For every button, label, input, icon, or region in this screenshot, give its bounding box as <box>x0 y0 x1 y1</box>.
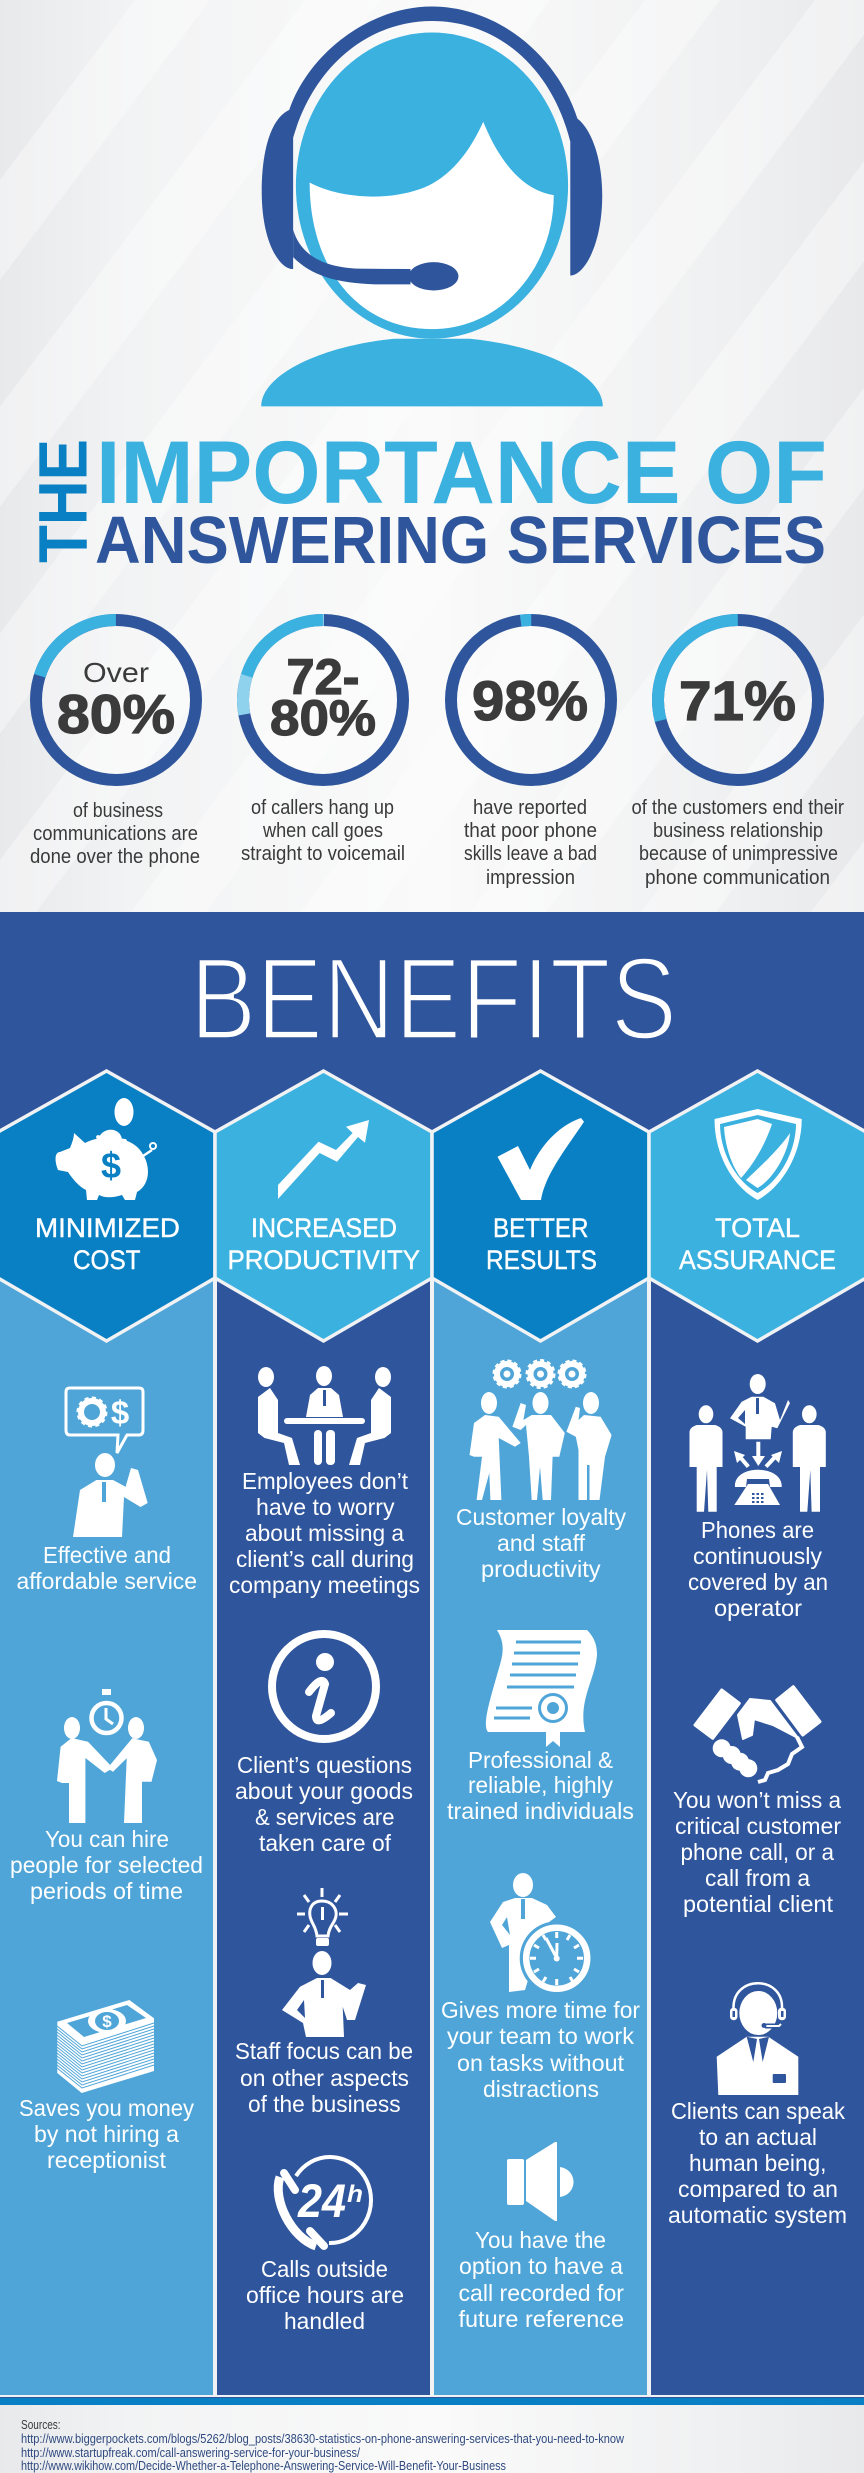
label: increased productivity: INCREASED <box>251 1213 397 1243</box>
stat: 71%: 71% <box>679 669 796 732</box>
text: actual human: automatic system <box>668 2202 847 2228</box>
title: IMPORTANCE OF <box>96 422 827 522</box>
panel: sources <box>0 2405 864 2473</box>
stat: 72-80%: straight to voicemail <box>241 842 405 865</box>
text: actual human: to an actual <box>699 2124 817 2150</box>
stat: 71%: business relationship <box>653 819 823 842</box>
text: client questions: & services are <box>255 1804 394 1830</box>
text: more time: your team to work <box>447 2023 635 2049</box>
stat: over 80%: done over the phone <box>30 845 200 868</box>
icon: shield <box>715 1109 802 1200</box>
label: better results: BETTER <box>493 1213 588 1243</box>
icon: speaker <box>507 2142 574 2221</box>
icon: 24 hour phone <box>278 2157 371 2246</box>
panel: increased productivity header <box>215 1071 432 1341</box>
text: effective service: Effective and <box>43 1542 171 1568</box>
text: recorded calls: option to have a <box>459 2253 623 2279</box>
stat: 98%: that poor phone <box>464 819 597 842</box>
stat: 72-80%: 72- <box>286 649 360 705</box>
icon: certificate scroll <box>486 1630 597 1747</box>
text: professional: Professional & <box>468 1747 613 1773</box>
text: professional <box>447 1747 634 1824</box>
icon: gear and dollar speech bubble with person <box>66 1388 148 1537</box>
text: client questions: Client’s questions <box>237 1752 412 1778</box>
stat: 98% <box>442 611 620 889</box>
text: saves money: Saves you money <box>19 2095 194 2121</box>
text: recorded calls: call recorded for <box>458 2280 624 2306</box>
label: total assurance: TOTAL <box>715 1213 800 1243</box>
text: staff focus: of the business <box>248 2091 401 2117</box>
text: actual human <box>668 2098 847 2228</box>
text: employees: Employees don’t <box>242 1468 409 1494</box>
label: better results: RESULTS <box>486 1245 597 1275</box>
text: won't miss a call: phone call, or a <box>680 1839 834 1865</box>
label: increased productivity: PRODUCTIVITY <box>228 1245 420 1275</box>
icon: team directing phone <box>690 1374 826 1512</box>
text: client questions: taken care of <box>259 1830 392 1856</box>
text: employees: client’s call during <box>236 1546 414 1572</box>
stat: 72-80%: 80% <box>270 690 376 746</box>
stat: over 80%: of business <box>73 799 163 822</box>
stat: 71%: phone communication <box>645 866 830 889</box>
icon: person with clock <box>490 1873 594 1995</box>
icon: 24 hour phone: h <box>347 2181 363 2208</box>
text: won't miss a call: potential client <box>683 1891 834 1917</box>
text: hire people: periods of time <box>30 1878 183 1904</box>
icon: information circle <box>272 1634 376 1739</box>
label: increased productivity <box>228 1213 420 1275</box>
text: won't miss a call: call from a <box>705 1865 810 1891</box>
text: actual human: human being, <box>689 2150 826 2176</box>
panel: benefits background <box>0 912 864 2398</box>
panel: sources: Sources: <box>21 2417 61 2432</box>
panel: column backgrounds <box>0 1130 864 2397</box>
text: won't miss a call: critical customer <box>675 1813 841 1839</box>
text: hire people: You can hire <box>45 1826 169 1852</box>
label: total assurance <box>679 1213 836 1275</box>
stat: 71%: of the customers end their <box>632 796 844 819</box>
text: more time: Gives more time for <box>441 1997 640 2023</box>
text: phones covered <box>688 1517 828 1621</box>
text: outside hours: office hours are <box>246 2282 404 2308</box>
stat: 98%: have reported <box>473 796 587 819</box>
label: minimized cost: COST <box>73 1245 140 1275</box>
text: client questions <box>235 1752 413 1856</box>
text: customer loyalty: and staff <box>497 1530 586 1556</box>
label: total assurance: ASSURANCE <box>679 1245 836 1275</box>
icon: piggy bank: $ <box>101 1145 121 1186</box>
icon: team with gears <box>470 1360 612 1501</box>
stat: 98%: skills leave a bad <box>464 842 597 865</box>
panel: sources: http://www.wikihow.com/Decide-Whether-a-Telephone-Answering-Service-Will-Benefit-Your-Business <box>21 2458 506 2473</box>
text: phones covered: Phones are <box>701 1517 814 1543</box>
stat: over 80% <box>15 599 217 868</box>
stat: 71% <box>632 603 844 889</box>
icon: rising arrow <box>278 1120 369 1199</box>
text: phones covered: continuously <box>693 1543 823 1569</box>
text: employees: company meetings <box>229 1572 420 1598</box>
icon: stack of money <box>57 2000 154 2093</box>
stat: over 80%: 80% <box>57 683 175 745</box>
icon: gear and dollar speech bubble with person: $ <box>111 1394 129 1431</box>
label: minimized cost <box>35 1213 180 1275</box>
panel: total assurance header <box>649 1071 864 1341</box>
heading: benefits: BENEFITS <box>190 933 677 1064</box>
stat: 71%: because of unimpressive <box>639 842 838 865</box>
text: client questions: about your goods <box>235 1778 413 1804</box>
panel: sources: http://www.biggerpockets.com/blogs/5262/blog_posts/38630-statistics-on-phone-answering-services-that-you-need-to-know <box>21 2431 625 2446</box>
panel: better results header <box>432 1071 649 1341</box>
text: recorded calls: You have the <box>475 2227 606 2253</box>
title <box>24 422 827 578</box>
text: saves money: by not hiring a <box>34 2121 179 2147</box>
icon: 24 hour phone: 24 <box>297 2174 346 2227</box>
text: employees <box>229 1468 420 1598</box>
stat: 72-80%: when call goes <box>262 819 383 842</box>
stat: over 80%: communications are <box>33 822 198 845</box>
text: staff focus: on other aspects <box>240 2065 409 2091</box>
panel: minimized cost header <box>0 1071 215 1341</box>
title: ANSWERING SERVICES <box>95 503 826 578</box>
text: recorded calls <box>458 2227 624 2332</box>
text: more time <box>441 1997 640 2102</box>
text: employees: have to worry <box>256 1494 395 1520</box>
label: minimized cost: MINIMIZED <box>35 1213 180 1243</box>
text: saves money <box>19 2095 194 2173</box>
text: professional: reliable, highly <box>468 1772 613 1798</box>
text: staff focus: Staff focus can be <box>235 2038 413 2064</box>
title: THE <box>24 439 102 563</box>
icon: person with light bulb <box>282 1888 366 2037</box>
text: effective service: affordable service <box>16 1568 197 1594</box>
text: actual human: Clients can speak <box>671 2098 845 2124</box>
text: more time: distractions <box>483 2076 599 2102</box>
icon: meeting at table <box>258 1366 391 1465</box>
icon: operator with headset <box>717 1983 798 2095</box>
stat: 72-80% <box>222 599 424 865</box>
stat: 72-80%: of callers hang up <box>251 796 394 819</box>
text: outside hours: Calls outside <box>261 2256 388 2282</box>
text: customer loyalty <box>456 1504 626 1582</box>
text: outside hours: handled <box>284 2308 365 2334</box>
label: better results <box>486 1213 597 1275</box>
text: won't miss a call: You won’t miss a <box>673 1787 841 1813</box>
text: staff focus <box>235 2038 413 2117</box>
icon: stack of money: $ <box>102 2012 112 2031</box>
text: actual human: compared to an <box>678 2176 838 2202</box>
icon: piggy bank <box>56 1098 156 1200</box>
text: saves money: receptionist <box>47 2147 167 2173</box>
panel: sources: http://www.startupfreak.com/call-answering-service-for-your-business/ <box>21 2445 360 2460</box>
stat: 98%: impression <box>486 866 575 889</box>
text: phones covered: operator <box>714 1595 802 1621</box>
text: professional: trained individuals <box>447 1798 634 1824</box>
text: effective service <box>16 1542 197 1594</box>
stat: 98%: 98% <box>472 669 588 732</box>
text: phones covered: covered by an <box>688 1569 828 1595</box>
text: recorded calls: future reference <box>458 2306 624 2332</box>
text: hire people <box>10 1826 203 1904</box>
icon: check mark <box>498 1118 584 1200</box>
icon: handshake with stopwatch <box>57 1689 157 1823</box>
icon: handshake <box>695 1687 820 1782</box>
text: employees: about missing a <box>245 1520 404 1546</box>
text: hire people: people for selected <box>10 1852 203 1878</box>
stat: over 80%: Over <box>83 657 149 688</box>
text: customer loyalty: Customer loyalty <box>456 1504 626 1530</box>
footer bar <box>0 2398 864 2405</box>
text: customer loyalty: productivity <box>481 1556 601 1582</box>
text: won't miss a call <box>673 1787 841 1917</box>
text: more time: on tasks without <box>457 2050 625 2076</box>
icon: headset operator <box>261 7 603 406</box>
text: outside hours <box>246 2256 404 2334</box>
